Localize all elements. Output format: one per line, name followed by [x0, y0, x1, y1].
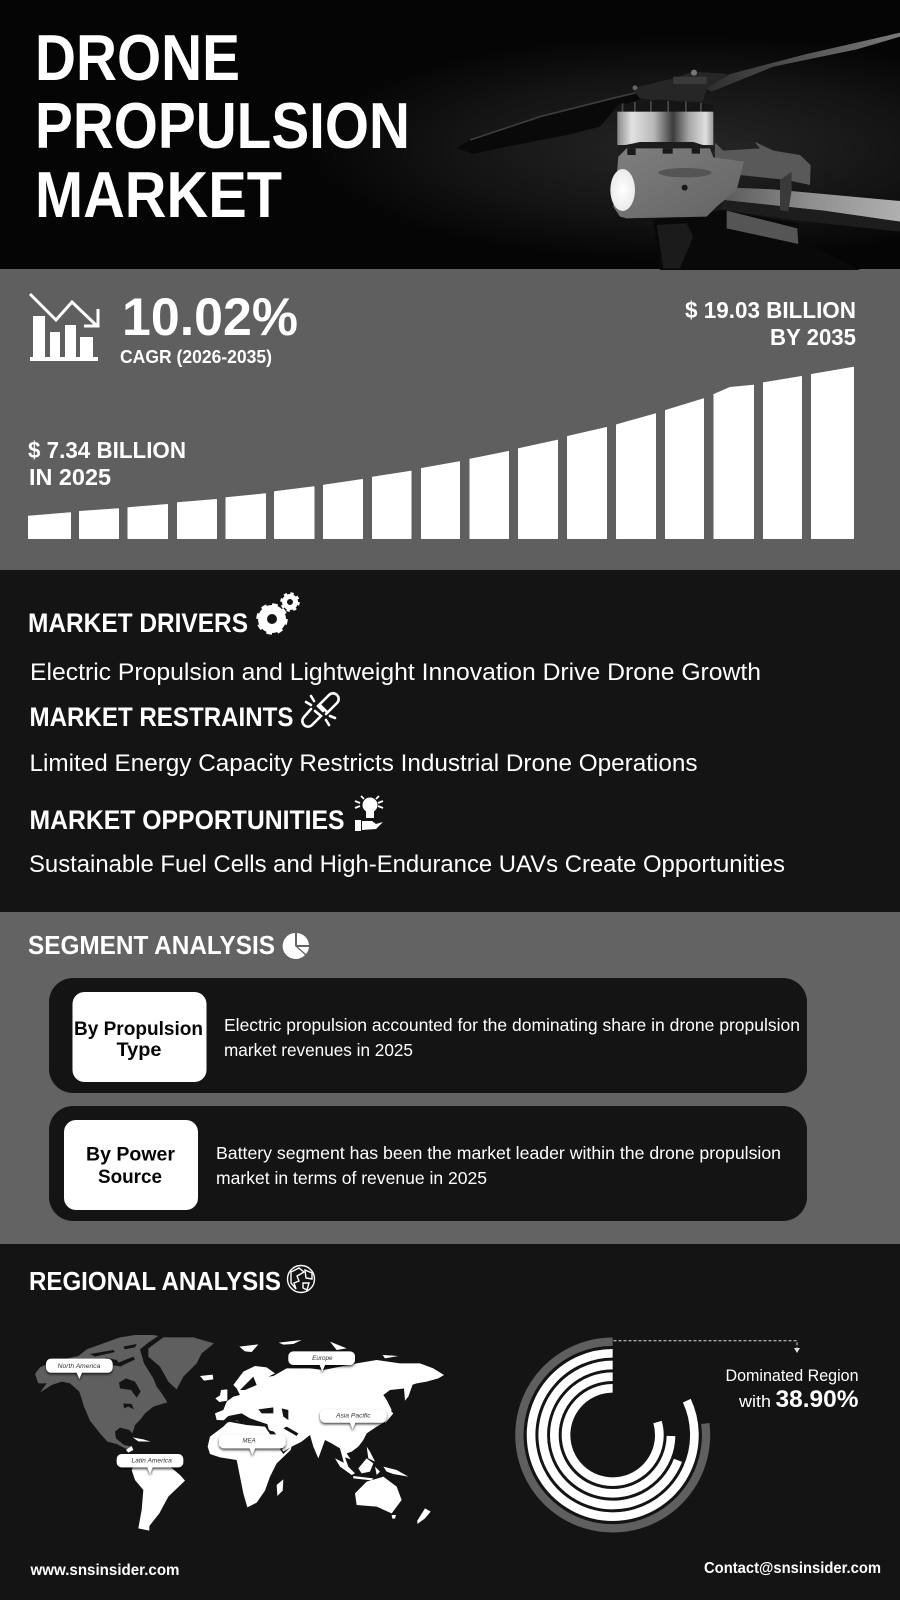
photo: drone motor and propeller [457, 33, 900, 270]
stats panel background [0, 269, 900, 570]
title: MARKET [35, 158, 282, 231]
card: by power source: Source [98, 1167, 162, 1188]
segment panel background [0, 912, 900, 1244]
New Zealand [417, 1508, 431, 1524]
North America water bodies [90, 1344, 141, 1409]
heading: regional analysis: REGIONAL ANALYSIS [29, 1266, 281, 1296]
card: by propulsion type: Type [116, 1040, 162, 1061]
Eurasia [215, 1360, 444, 1467]
2035 value label: BY 2035 [770, 324, 856, 350]
card: by propulsion type: By Propulsion [74, 1019, 203, 1040]
motor base [617, 142, 713, 157]
lower bracket [727, 211, 798, 244]
arm upper bracket [715, 143, 811, 185]
New Guinea [383, 1467, 408, 1477]
carbon arm [723, 188, 900, 222]
CAGR value: 10.02% [122, 288, 298, 347]
callout: dominated region: with [738, 1392, 771, 1411]
2035 value label [685, 297, 856, 350]
callout: dominated region: Dominated Region [726, 1366, 858, 1385]
icon: idea bulb in hand [355, 796, 383, 831]
title [35, 21, 410, 231]
Australia [355, 1477, 402, 1513]
footer: contact email: Contact@snsinsider.com [704, 1560, 881, 1577]
Svalbard [239, 1344, 258, 1352]
2025 value label [28, 437, 186, 490]
South America [132, 1460, 185, 1531]
text: drivers: Electric Propulsion and Lightweight Innovation Drive Drone Growth [30, 659, 761, 686]
heading: segment analysis: SEGMENT ANALYSIS [28, 930, 275, 960]
label: MEA: MEA [242, 1438, 256, 1445]
2025 value label: $ 7.34 BILLION [28, 437, 186, 463]
Iceland [200, 1375, 213, 1381]
radial bar chart [519, 1342, 706, 1528]
world map [35, 1335, 444, 1531]
footer: website: www.snsinsider.com [30, 1562, 179, 1579]
icon: declining chart [30, 294, 98, 361]
Central America [126, 1446, 133, 1453]
regional panel background [0, 1244, 900, 1600]
label: MEA [219, 1434, 286, 1455]
propeller right blade [705, 33, 900, 92]
2025 value label: IN 2025 [29, 464, 111, 490]
Japan [385, 1408, 393, 1423]
card: by propulsion type [49, 978, 807, 1093]
callout: dominated region: 38.90% [776, 1386, 859, 1413]
heading: market restraints: MARKET RESTRAINTS [30, 702, 294, 732]
housing notches [627, 148, 700, 155]
card: by power source [49, 1106, 807, 1221]
title: PROPULSION [35, 89, 410, 162]
card: by power source: Battery segment has been the market leader within the drone propulsion [216, 1143, 781, 1163]
label: Asia Pacific [320, 1409, 387, 1429]
card: by propulsion type: market revenues in 2025 [224, 1040, 413, 1060]
housing shadow detail [658, 168, 712, 177]
lower stem [657, 223, 693, 268]
gray housing [613, 148, 744, 218]
Caribbean [133, 1437, 151, 1442]
icon: broken chain [302, 693, 339, 727]
label: Europe [288, 1351, 355, 1372]
Arctic islands [279, 1340, 302, 1345]
arm clamp [780, 172, 792, 212]
Sumatra [335, 1458, 355, 1475]
title: DRONE [35, 21, 240, 94]
Madagascar [277, 1479, 283, 1496]
landmasses [126, 1340, 444, 1531]
carbon arm underside [720, 200, 900, 232]
card: by power source: By Power [86, 1144, 176, 1166]
callout: dominated region [726, 1366, 859, 1413]
label: Latin America: Latin America [131, 1457, 172, 1464]
Africa [208, 1422, 292, 1507]
header background [0, 0, 900, 270]
Borneo [358, 1458, 373, 1473]
CAGR label: CAGR (2026-2035) [120, 347, 272, 367]
label: North America [46, 1359, 113, 1379]
lamp [610, 169, 635, 211]
icon: globe [288, 1266, 314, 1292]
Sulawesi [375, 1467, 380, 1475]
inland seas [223, 1377, 298, 1450]
card: by power source: market in terms of revenue in 2025 [216, 1168, 487, 1188]
Tasmania [392, 1515, 396, 1519]
icon: pie chart [283, 933, 309, 959]
text: opportunities: Sustainable Fuel Cells and High-Endurance UAVs Create Opportunities [29, 851, 785, 878]
propeller left blade [457, 92, 643, 154]
label: Asia Pacific: Asia Pacific [335, 1413, 372, 1420]
2035 value label: $ 19.03 BILLION [685, 297, 856, 323]
text: restraints: Limited Energy Capacity Restricts Industrial Drone Operations [30, 750, 698, 777]
market dynamics panel background [0, 570, 900, 912]
dashed leader arrow [614, 1341, 800, 1353]
bar chart [28, 367, 854, 538]
lower assembly [653, 210, 860, 270]
Java [353, 1476, 373, 1480]
label: Europe: Europe [312, 1355, 333, 1362]
label: Latin America [117, 1454, 183, 1474]
region: North America and Greenland [35, 1335, 214, 1450]
label: North America: North America [58, 1363, 101, 1370]
motor top [617, 99, 713, 115]
heading: market drivers: MARKET DRIVERS [28, 608, 248, 638]
Kamchatka [404, 1383, 413, 1401]
UK and Ireland [215, 1389, 227, 1402]
icon: gears [258, 594, 298, 633]
motor cylinder [617, 112, 713, 145]
card: by propulsion type: Electric propulsion accounted for the dominating share in drone propulsion [224, 1015, 800, 1035]
heading: market opportunities: MARKET OPPORTUNITIES [30, 805, 344, 835]
Philippines [367, 1447, 375, 1462]
propeller hub [632, 72, 728, 102]
